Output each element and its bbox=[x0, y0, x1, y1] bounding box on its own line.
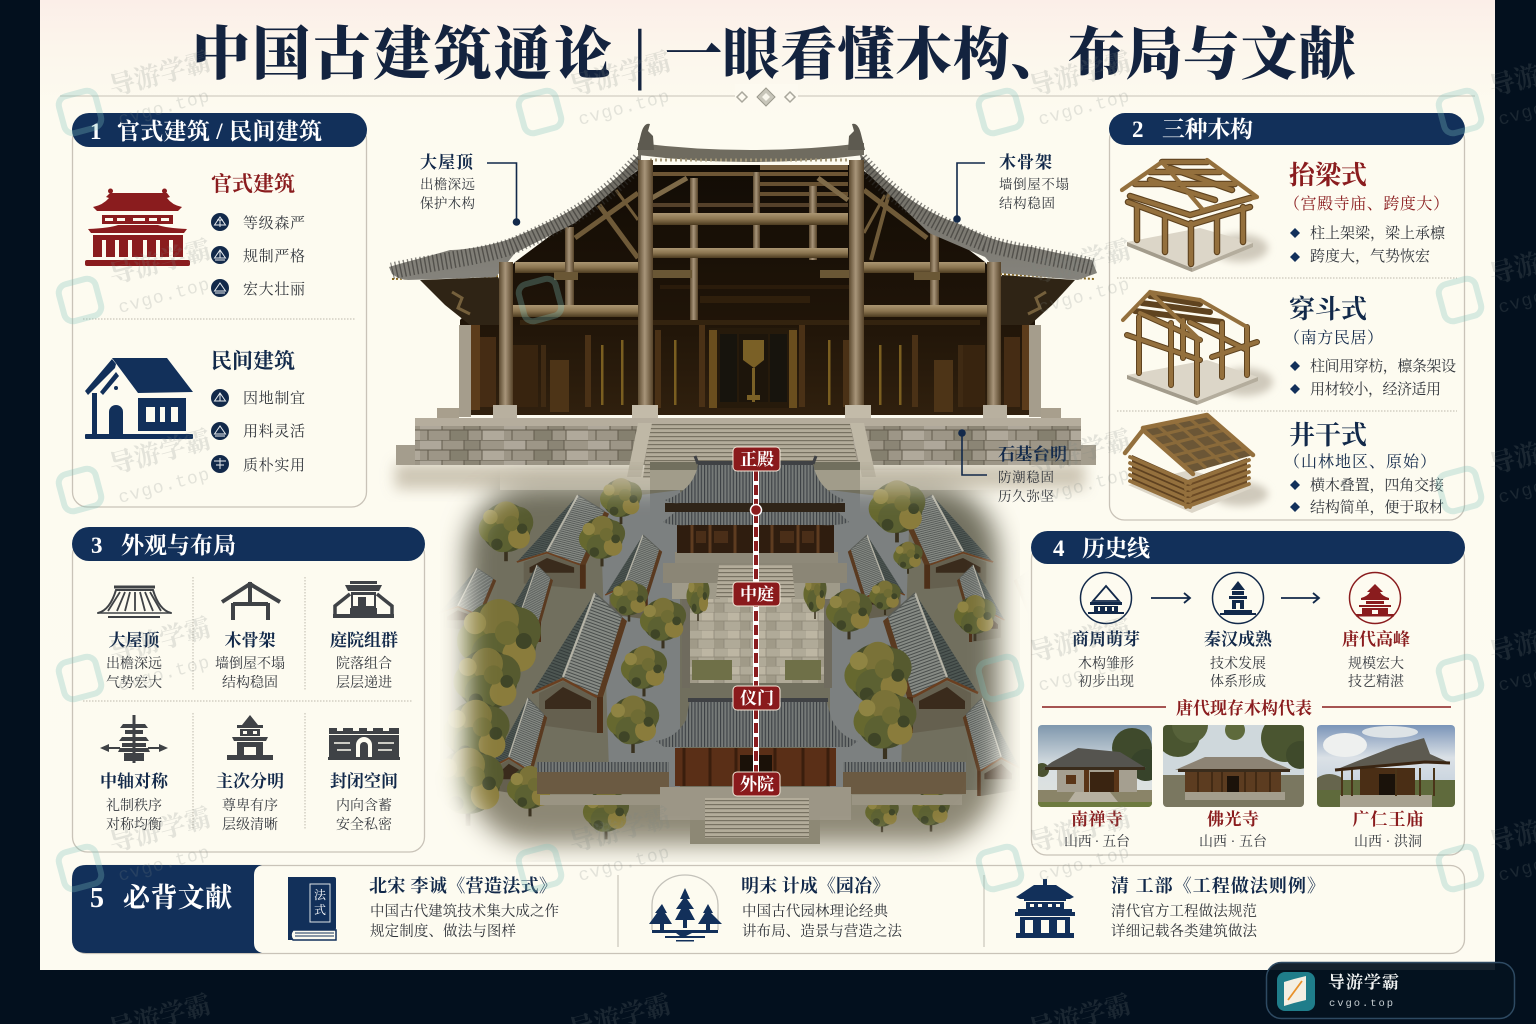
source: 园冶: 中国古代园林理论经典 bbox=[742, 903, 890, 920]
heading: 抬梁式: 抬梁式 bbox=[1289, 160, 1367, 190]
arrow bbox=[1151, 593, 1190, 603]
callout: 大屋顶: 出檐深远 bbox=[420, 176, 475, 192]
icon: red palace bbox=[85, 188, 190, 266]
title divider ornament bbox=[60, 84, 1475, 108]
cell: 庭院组群: 院落组合 bbox=[336, 656, 392, 672]
photo captions: 佛光寺 bbox=[1207, 809, 1259, 829]
callout: 石基台明: 石基台明 bbox=[998, 445, 1067, 464]
timeline: 秦汉成熟: 秦汉成熟 bbox=[1204, 629, 1273, 649]
source: 营造法式: 规定制度、做法与图样 bbox=[370, 922, 516, 940]
cell: 木骨架: 结构稳固 bbox=[222, 674, 278, 691]
eave brackets bbox=[392, 274, 1095, 325]
panel 5 heading block bbox=[72, 865, 262, 953]
points for 井干式: 结构简单，便于取材 bbox=[1310, 498, 1444, 516]
vernacular list bbox=[211, 389, 305, 474]
watermark overlay: 导游学霸 bbox=[106, 613, 214, 668]
watermark overlay: 导游学霸 bbox=[1026, 803, 1134, 858]
callout: 木骨架: 墙倒屋不塌 bbox=[999, 176, 1069, 192]
official list: 宏大壮丽 bbox=[243, 281, 305, 298]
hall stone pilasters bbox=[459, 325, 1041, 417]
icon: garden bbox=[649, 875, 722, 942]
upper frame lattice bbox=[652, 165, 848, 320]
watermark overlay: cvgo.top bbox=[116, 653, 213, 697]
photo captions: 山西 · 洪洞 bbox=[1354, 834, 1422, 850]
source: 工程做法则例: 详细记载各类建筑做法 bbox=[1111, 922, 1258, 940]
vernacular list: 因地制宜 bbox=[243, 389, 305, 407]
source: 园冶: 讲布局、造景与营造之法 bbox=[742, 922, 902, 940]
footer brand badge bbox=[1266, 962, 1514, 1018]
hall interior bbox=[460, 165, 1035, 415]
cell: 大屋顶: 大屋顶 bbox=[108, 631, 160, 650]
axis label: 中庭: 中庭 bbox=[740, 585, 774, 604]
panel 3 heading: 外观与布局 bbox=[121, 533, 236, 558]
points for 抬梁式: 柱上架梁，梁上承檩 bbox=[1310, 224, 1446, 242]
cell: 大屋顶: 出檐深远 bbox=[106, 655, 162, 672]
cell: 主次分明 bbox=[216, 715, 284, 833]
icon: book bbox=[288, 877, 336, 940]
panel 2 heading: 2 bbox=[1132, 117, 1144, 142]
title: 一眼看懂木构、布局与文献 bbox=[665, 24, 1358, 87]
front stairs bbox=[627, 423, 876, 478]
callout: 木骨架: 结构稳固 bbox=[999, 195, 1055, 211]
timeline: 秦汉成熟: 体系形成 bbox=[1210, 673, 1266, 690]
hall ridge with ornaments bbox=[637, 124, 865, 162]
panel 2: three timber structures bbox=[1109, 113, 1465, 520]
watermark overlay: 导游学霸 bbox=[1026, 613, 1134, 668]
axis label: 仪门: 仪门 bbox=[740, 689, 774, 708]
timeline: 商周萌芽 bbox=[1072, 572, 1140, 690]
cell: 主次分明: 尊卑有序 bbox=[222, 798, 278, 814]
photo captions: 山西 · 五台 bbox=[1064, 834, 1130, 850]
points for 穿斗式: 柱间用穿枋，檩条架设 bbox=[1310, 357, 1456, 375]
panel 4: history timeline bbox=[1031, 531, 1465, 855]
watermark overlay: 导游学霸 bbox=[106, 425, 214, 480]
callout: 木骨架: 木骨架 bbox=[999, 152, 1052, 172]
photo captions bbox=[1064, 809, 1424, 850]
points for 穿斗式 bbox=[1290, 357, 1456, 398]
photo: 佛光寺 bbox=[1163, 725, 1304, 807]
cell: 大屋顶: 气势宏大 bbox=[106, 674, 162, 691]
panel 3: appearance and layout bbox=[72, 527, 425, 852]
badge logo bbox=[1277, 972, 1315, 1011]
subtitle: （南方民居） bbox=[1284, 329, 1383, 347]
model: 穿斗式 timber frame bbox=[1123, 292, 1273, 405]
callout: 大屋顶: 大屋顶 bbox=[420, 153, 474, 172]
panel 5 heading block: 5 bbox=[90, 883, 104, 914]
icon: book: 法 bbox=[314, 887, 327, 902]
panel 4 heading: 4 bbox=[1053, 536, 1065, 561]
side halls right bbox=[848, 494, 1012, 796]
source: 工程做法则例 bbox=[1111, 876, 1325, 940]
stone platform bbox=[396, 408, 1096, 465]
watermark overlay: cvgo.top bbox=[576, 87, 673, 131]
hall central door bbox=[709, 328, 797, 408]
callout: 石基台明: 历久弥坚 bbox=[998, 488, 1054, 504]
watermark overlay: 导游学霸 bbox=[1026, 235, 1134, 290]
timeline: 唐代高峰: 规模宏大 bbox=[1348, 655, 1404, 672]
official list: 等级森严 bbox=[243, 215, 305, 232]
watermark logo icons bbox=[57, 89, 1483, 891]
watermark overlay: cvgo.top bbox=[116, 843, 213, 887]
watermark overlay: cvgo.top bbox=[1036, 843, 1133, 887]
cell: 封闭空间: 安全私密 bbox=[336, 817, 392, 833]
hero illustration: main timber hall bbox=[389, 124, 1097, 489]
panel 1: official and vernacular architecture bbox=[72, 113, 367, 507]
subtitle: （山林地区、原始） bbox=[1284, 452, 1436, 471]
roof tile texture bbox=[392, 160, 1094, 271]
subtitle: （宫殿寺庙、跨度大） bbox=[1284, 195, 1449, 213]
callout: 大屋顶: 保护木构 bbox=[420, 195, 475, 211]
callout: 木骨架 bbox=[953, 152, 1069, 223]
footer brand badge: 导游学霸 bbox=[1328, 973, 1399, 992]
timeline: 商周萌芽: 初步出现 bbox=[1078, 673, 1134, 690]
points for 抬梁式 bbox=[1290, 224, 1446, 265]
cell: 庭院组群: 层层递进 bbox=[336, 675, 392, 691]
callout: 大屋顶 bbox=[420, 153, 520, 226]
timeline: 商周萌芽: 木构雏形 bbox=[1078, 655, 1134, 672]
watermark overlay: cvgo.top bbox=[1036, 653, 1133, 697]
cell: 中轴对称: 对称均衡 bbox=[106, 817, 162, 833]
panel 4 heading: 历史线 bbox=[1082, 536, 1150, 561]
cell: 木骨架 bbox=[215, 582, 285, 691]
panel 2 heading: 三种木构 bbox=[1162, 117, 1253, 142]
icon: Qing pavilion bbox=[1015, 879, 1075, 938]
axis label: 中庭 bbox=[733, 582, 780, 606]
heading: 官式建筑: 官式建筑 bbox=[211, 172, 295, 196]
watermark overlay: 导游学霸 bbox=[106, 235, 214, 290]
source: 营造法式: 北宋 李诚《营造法式》 bbox=[369, 876, 557, 896]
cell: 封闭空间: 封闭空间 bbox=[330, 771, 398, 791]
timeline: 秦汉成熟: 技术发展 bbox=[1210, 655, 1266, 672]
heading: 穿斗式: 穿斗式 bbox=[1289, 294, 1367, 324]
photo captions: 广仁王庙 bbox=[1352, 810, 1424, 829]
title: 中国古建筑通论 bbox=[192, 22, 612, 87]
source: 园冶 bbox=[741, 876, 902, 940]
cell: 中轴对称: 中轴对称 bbox=[100, 772, 169, 791]
callout: 石基台明: 防潮稳固 bbox=[998, 469, 1054, 485]
cell: 主次分明: 层级清晰 bbox=[222, 816, 278, 833]
hall roof right slope bbox=[859, 152, 1097, 280]
watermark overlay: 导游学霸 bbox=[106, 803, 214, 858]
cell: 封闭空间: 内向含蓄 bbox=[336, 797, 392, 814]
timeline: 商周萌芽: 商周萌芽 bbox=[1072, 629, 1140, 649]
axis label: 外院 bbox=[733, 772, 780, 796]
cell: 中轴对称 bbox=[100, 715, 169, 833]
courtyard aerial view bbox=[432, 456, 1071, 862]
icon: book: 式 bbox=[314, 902, 326, 917]
cell: 主次分明: 主次分明 bbox=[216, 771, 284, 791]
watermark overlay: 导游学霸 bbox=[106, 47, 214, 102]
timeline: 秦汉成熟 bbox=[1204, 572, 1273, 690]
subheading: 唐代现存木构代表: 唐代现存木构代表 bbox=[1176, 698, 1312, 718]
central axis markers bbox=[733, 447, 780, 796]
photo: 南禅寺 bbox=[1038, 725, 1152, 807]
watermark overlay: 导游学霸 bbox=[1026, 47, 1134, 102]
panel 5 heading block: 必背文献 bbox=[123, 883, 234, 913]
cell: 木骨架: 墙倒屋不塌 bbox=[215, 655, 285, 672]
gate building and enclosure wall bbox=[537, 698, 966, 838]
hall wall panels and inner columns bbox=[470, 285, 1030, 412]
source: 营造法式: 中国古代建筑技术集大成之作 bbox=[370, 903, 559, 920]
side beams and braces bbox=[575, 190, 927, 260]
axis label: 外院: 外院 bbox=[740, 775, 774, 794]
vernacular list: 质朴实用 bbox=[243, 457, 305, 474]
source: 工程做法则例: 清代官方工程做法规范 bbox=[1111, 902, 1257, 920]
timeline: 唐代高峰 bbox=[1342, 572, 1410, 690]
title: | bbox=[633, 15, 647, 91]
hall roof left slope bbox=[389, 152, 641, 280]
heading: 民间建筑: 民间建筑 bbox=[211, 349, 295, 373]
cell: 封闭空间 bbox=[328, 728, 400, 833]
courtyard perimeter walkways bbox=[472, 470, 1001, 851]
callout: 石基台明 bbox=[958, 429, 1067, 504]
source: 工程做法则例: 清 工部《工程做法则例》 bbox=[1111, 876, 1325, 896]
watermark overlay: cvgo.top bbox=[1036, 465, 1133, 509]
watermark overlay: cvgo.top bbox=[116, 465, 213, 509]
footer brand badge: cvgo.top bbox=[1329, 998, 1393, 1010]
icon: navy house bbox=[85, 358, 193, 439]
timeline: 唐代高峰: 技艺精湛 bbox=[1348, 673, 1404, 690]
official list: 规制严格 bbox=[243, 247, 305, 265]
watermark overlay: cvgo.top bbox=[116, 275, 213, 319]
timeline: 唐代高峰: 唐代高峰 bbox=[1342, 629, 1410, 649]
ground band bbox=[395, 463, 1085, 489]
source: 园冶: 明末 计成《园冶》 bbox=[741, 876, 890, 896]
panel 1 heading: 官式建筑 / 民间建筑 bbox=[117, 119, 322, 144]
points for 井干式: 横木叠置，四角交接 bbox=[1310, 476, 1444, 494]
panel 4 heading bbox=[1031, 531, 1465, 564]
cell: 中轴对称: 礼制秩序 bbox=[106, 797, 162, 814]
main courtyard hall bbox=[663, 456, 849, 598]
photo captions: 南禅寺 bbox=[1071, 809, 1123, 829]
cell: 庭院组群: 庭院组群 bbox=[330, 631, 398, 650]
heading: 井干式: 井干式 bbox=[1289, 421, 1367, 450]
watermark overlay: cvgo.top bbox=[1036, 87, 1133, 131]
model: 井干式 log structure bbox=[1125, 415, 1268, 513]
watermark overlay: cvgo.top bbox=[116, 87, 213, 131]
panel 5: must-recite literature bbox=[72, 865, 1464, 954]
watermark overlay: cvgo.top bbox=[576, 843, 673, 887]
hall main columns bbox=[493, 160, 1007, 418]
title bbox=[192, 15, 1358, 91]
central plaza bbox=[672, 575, 840, 688]
watermark overlay: 导游学霸 bbox=[566, 803, 674, 858]
panel 1 heading bbox=[72, 113, 367, 147]
watermark overlay: 导游学霸 bbox=[566, 47, 674, 102]
source: 营造法式 bbox=[369, 876, 559, 940]
panel 3 heading: 3 bbox=[91, 533, 102, 558]
points for 穿斗式: 用材较小，经济适用 bbox=[1310, 381, 1441, 398]
points for 井干式 bbox=[1290, 476, 1444, 516]
arrow bbox=[1281, 593, 1319, 603]
panel 1 heading: 1 bbox=[90, 119, 102, 144]
points for 抬梁式: 跨度大，气势恢宏 bbox=[1310, 247, 1430, 265]
axis label: 正殿: 正殿 bbox=[740, 450, 774, 469]
watermark overlay: cvgo.top bbox=[1036, 275, 1133, 319]
courtyard trees bbox=[432, 478, 996, 839]
official list bbox=[211, 213, 305, 298]
model: 抬梁式 timber frame bbox=[1122, 160, 1268, 272]
photo captions: 山西 · 五台 bbox=[1199, 834, 1267, 850]
vernacular list: 用料灵活 bbox=[243, 423, 305, 440]
watermark overlay: 导游学霸 bbox=[1026, 425, 1134, 480]
cell: 木骨架: 木骨架 bbox=[224, 630, 276, 650]
cell: 庭院组群 bbox=[330, 581, 398, 691]
axis label: 仪门 bbox=[733, 686, 780, 710]
panel 3 heading bbox=[72, 527, 425, 561]
photo: 广仁王庙 bbox=[1317, 725, 1455, 807]
cell: 大屋顶 bbox=[97, 587, 172, 691]
axis label: 正殿 bbox=[733, 447, 780, 471]
side halls left bbox=[439, 495, 662, 796]
panel 2 heading bbox=[1109, 113, 1465, 145]
